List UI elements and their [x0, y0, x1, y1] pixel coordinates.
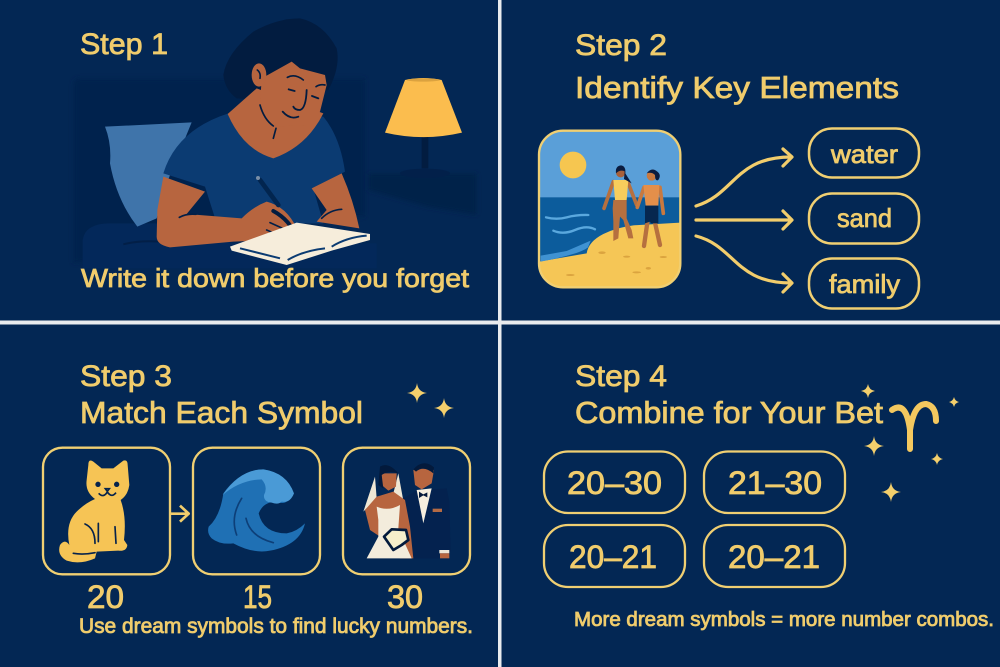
- left arm: [157, 177, 297, 247]
- caption: step 3: Use dream symbols to find lucky numbers.: [79, 615, 473, 638]
- heading: step 2: Step 2: [575, 29, 667, 62]
- sparkles: [407, 383, 454, 418]
- panel: step 1: [73, 18, 477, 293]
- woman: [604, 165, 637, 241]
- panel: step 2: [539, 29, 919, 308]
- pill: family: family: [829, 269, 900, 299]
- open notebook: [230, 223, 370, 265]
- subheading: match each symbol: Match Each Symbol: [80, 395, 363, 430]
- lamp shade: [385, 78, 462, 137]
- card: wedding couple: [343, 448, 470, 574]
- pill: sand: sand: [837, 203, 892, 233]
- illustration: person journaling in bed: [73, 18, 477, 268]
- arrow: to sand: [696, 211, 792, 229]
- sparkles: [861, 384, 959, 502]
- icon: cat: [59, 460, 129, 562]
- pillow: [105, 122, 192, 227]
- icon: bride: [363, 465, 413, 558]
- pill: family: [809, 258, 919, 308]
- caption: step 4: More dream symbols = more number combos.: [574, 609, 994, 631]
- footprints: [566, 251, 667, 276]
- shirt: [163, 113, 345, 223]
- heading: step 1: Step 1: [80, 28, 168, 61]
- pill: 21-30: [704, 452, 845, 513]
- pill: water: [809, 128, 919, 178]
- icon: wave: [208, 469, 305, 551]
- subheading: identify key elements: Identify Key Elements: [575, 70, 899, 105]
- card: cat: [43, 448, 170, 574]
- neck and chest: [228, 88, 323, 158]
- card: wave: [193, 448, 320, 574]
- heading: step 3: Step 3: [80, 360, 172, 393]
- headboard: [73, 78, 365, 263]
- arrow: cat to wave: [171, 506, 189, 522]
- pill: water: water: [830, 139, 898, 169]
- number: couple 30: 30: [387, 579, 423, 615]
- pill: 20-21 right: 20–21: [728, 539, 820, 575]
- symbol cards: [43, 448, 470, 574]
- number: cat 20: 20: [87, 579, 124, 615]
- facial features: [257, 70, 325, 138]
- bedside table: [368, 173, 477, 215]
- pill: 20-21 right: [704, 525, 845, 587]
- heading: step 4: Step 4: [575, 360, 667, 393]
- hair: [223, 18, 338, 100]
- caption: step 1: Write it down before you forget: [81, 263, 470, 293]
- face: [260, 62, 327, 127]
- bed cover: [83, 223, 377, 268]
- panel: step 3: [43, 360, 473, 638]
- right arm: [312, 173, 359, 228]
- arrow: to water: [696, 149, 792, 206]
- illustration: family at the beach: [539, 131, 680, 287]
- ear: [252, 63, 266, 87]
- pill: 20-30: [544, 452, 685, 513]
- pill: 20-30: 20–30: [567, 465, 662, 501]
- arrow: to family: [696, 236, 792, 292]
- icon: groom: [403, 463, 451, 558]
- panel: step 4: [544, 360, 994, 631]
- pill: 21-30: 21–30: [728, 465, 822, 501]
- icon: aries symbol: [892, 404, 936, 449]
- pill: 20-21 left: [544, 525, 685, 587]
- pen: [260, 180, 278, 205]
- subheading: combine for your bet: Combine for Your Bet: [575, 395, 883, 430]
- number: wave 15: 15: [243, 579, 272, 615]
- man: [637, 170, 663, 246]
- pill: sand: [809, 194, 919, 244]
- pill: 20-21 left: 20–21: [569, 539, 657, 575]
- lamp stem: [415, 137, 435, 168]
